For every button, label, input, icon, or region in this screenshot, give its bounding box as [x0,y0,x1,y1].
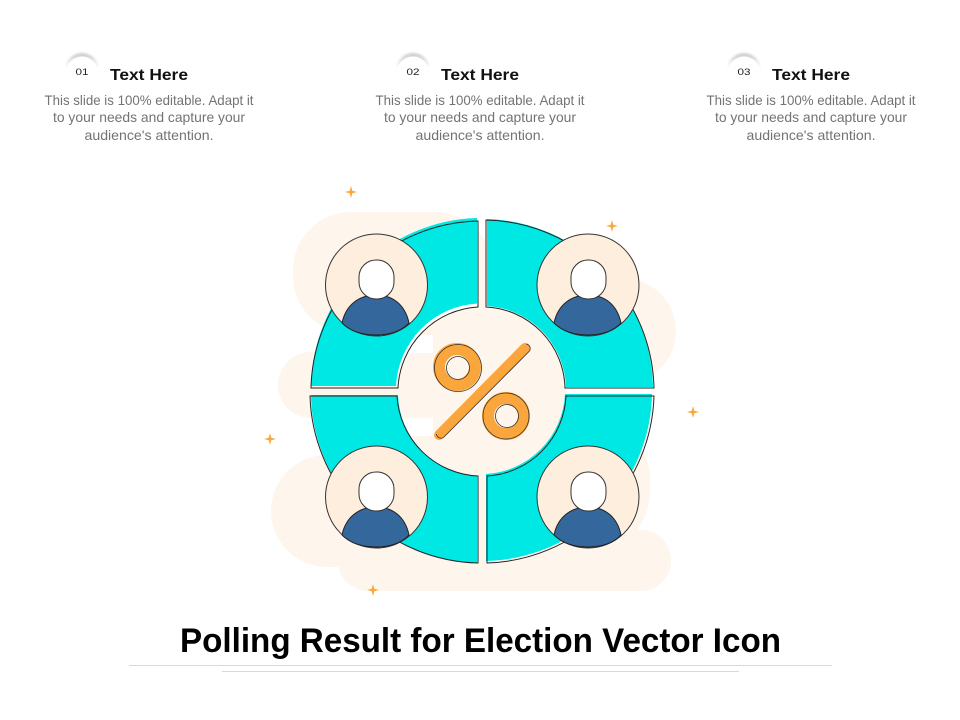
body text 3: to your needs and capture your [715,109,907,125]
body text 1 [44,92,254,143]
badge 01 [65,53,99,88]
body text 2: audience's attention. [416,127,544,143]
person icon: bottom left [326,446,428,548]
badge 03: 03 [738,67,750,77]
person icon: top left [326,234,428,336]
heading 1: Text Here [110,67,188,84]
body text 3: audience's attention. [746,127,876,143]
body text 3: This slide is 100% editable. Adapt it [706,92,916,108]
body text 2 [376,92,585,143]
person icon: top right [537,234,639,336]
title underline [129,665,832,672]
badge 02 [396,53,430,88]
body text 1: This slide is 100% editable. Adapt it [44,92,254,108]
body text 1: audience's attention. [84,127,214,143]
badge 03 [727,53,761,88]
column 3: text block [706,53,916,143]
donut chart segments [310,218,654,563]
badge 02: 02 [406,67,420,77]
segment: bottom left [310,395,478,563]
column 2: text block [376,53,585,143]
center disc [404,307,566,459]
heading 3: Text Here [772,67,850,84]
segment: top right [486,219,654,388]
background blobs [271,212,676,591]
column 1: text block [44,53,254,143]
body text 1: to your needs and capture your [53,109,245,125]
segment: top left [311,218,478,388]
body text 3 [706,92,916,143]
person icon: bottom right [537,446,639,548]
segment: bottom right [486,394,654,563]
badge 01: 01 [76,67,88,77]
body text 2: to your needs and capture your [384,109,576,125]
percent icon [434,344,530,439]
heading 2: Text Here [441,67,519,84]
body text 2: This slide is 100% editable. Adapt it [376,92,585,108]
title: Polling Result for Election Vector Icon [180,622,781,660]
sparkles [264,186,699,596]
